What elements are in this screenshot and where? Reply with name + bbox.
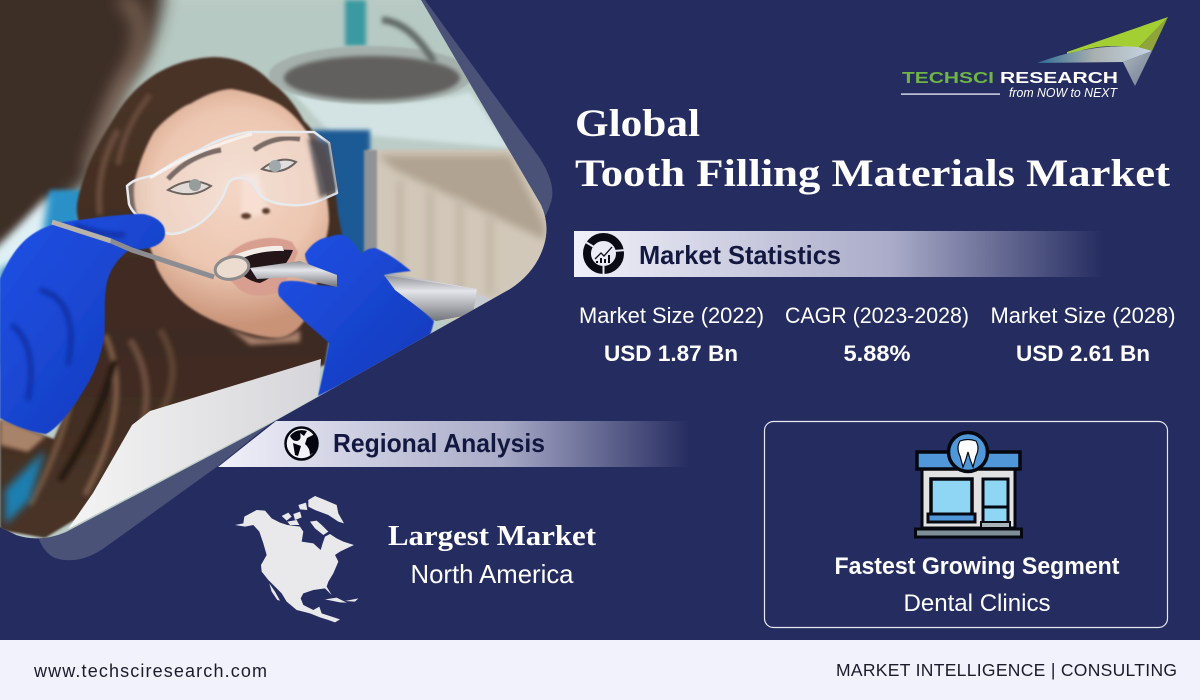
stat: market size 2028 xyxy=(990,303,1176,366)
eyes and brows xyxy=(168,138,300,219)
icon: dental clinic xyxy=(916,432,1022,537)
left glove xyxy=(0,214,165,434)
segment label: Fastest Growing Segment xyxy=(834,553,1120,580)
segment value: Dental Clinics xyxy=(904,590,1050,617)
hair xyxy=(0,57,345,538)
panel: market statistics header xyxy=(574,231,1104,277)
panel: fastest growing segment xyxy=(764,422,1168,628)
title xyxy=(575,102,1170,195)
title: Tooth Filling Materials Market xyxy=(575,152,1170,195)
mirror tool xyxy=(52,222,251,282)
text: largest market xyxy=(388,520,596,589)
footer xyxy=(0,640,1200,700)
dentist shoulder xyxy=(38,186,81,230)
heading: Market Statistics xyxy=(639,240,841,270)
wrist and teal fabric xyxy=(0,418,46,452)
logo wordmark: TECHSCI xyxy=(902,70,994,87)
panel: regional analysis header xyxy=(218,421,690,467)
map: north america xyxy=(235,496,358,622)
icon: globe xyxy=(286,428,318,460)
hair strands xyxy=(30,95,172,505)
logo xyxy=(901,17,1168,100)
bib xyxy=(68,359,321,529)
stat: cagr: 5.88% xyxy=(844,341,910,366)
right glove xyxy=(278,235,434,396)
stat: market size 2028: Market Size (2028) xyxy=(990,303,1176,328)
stat: market size 2022 xyxy=(579,303,764,366)
handpiece head xyxy=(250,261,337,287)
stat: cagr xyxy=(785,303,969,366)
handpiece body over glove xyxy=(384,275,477,321)
website: www.techsciresearch.com xyxy=(33,661,267,681)
logo wordmark xyxy=(902,70,1118,87)
text: largest market: Largest Market xyxy=(388,520,596,552)
safety glasses xyxy=(127,132,337,234)
stat: market size 2022: USD 1.87 Bn xyxy=(604,341,738,366)
stat: market size 2022: Market Size (2022) xyxy=(579,303,764,328)
photo frame band xyxy=(38,0,552,560)
title: Global xyxy=(575,102,700,145)
clinic background xyxy=(0,0,560,560)
icon: donut chart xyxy=(584,237,626,276)
tagline: MARKET INTELLIGENCE | CONSULTING xyxy=(836,660,1177,680)
mouth xyxy=(218,238,298,296)
dentist head xyxy=(0,0,165,270)
face xyxy=(134,89,329,338)
heading: Regional Analysis xyxy=(333,428,545,458)
logo tagline: from NOW to NEXT xyxy=(1009,86,1118,100)
stat: cagr: CAGR (2023-2028) xyxy=(785,303,969,328)
text: largest market: North America xyxy=(410,559,574,589)
photo: dentist treating patient xyxy=(0,0,560,560)
stat: market size 2028: USD 2.61 Bn xyxy=(1016,341,1150,366)
jaw shadow xyxy=(225,325,300,345)
logo wordmark: RESEARCH xyxy=(1000,70,1118,87)
handpiece rear xyxy=(384,274,477,321)
